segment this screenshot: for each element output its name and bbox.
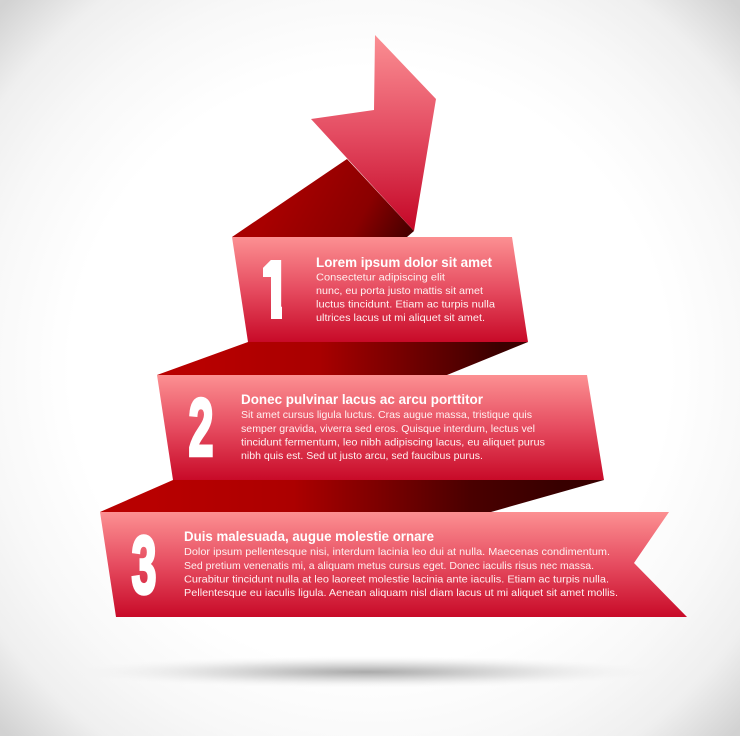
panel 1 ribbon (232, 237, 528, 342)
panel 3 body text: Pellentesque eu iaculis ligula. Aenean aliquam nisl diam lacus ut mi aliquet sit amet mollis. (184, 587, 618, 599)
icon: arrow head (311, 35, 436, 231)
ground shadow (66, 656, 666, 688)
dark fold between panels 2 and 3 (100, 480, 604, 512)
panel 2 (157, 375, 604, 480)
panel 2 body text: nibh quis est. Sed ut justo arcu, sed faucibus purus. (241, 450, 483, 462)
panel 3 (100, 512, 687, 617)
panel 3 body text (184, 546, 618, 599)
panel 1 body text: Consectetur adipiscing elit (316, 272, 445, 284)
number 1: 1 (256, 242, 288, 342)
panel 3 body text: Sed pretium venenatis mi, a aliquam metus cursus eget. Donec iaculis risus nec massa. (184, 560, 594, 572)
panel 1 (232, 237, 528, 342)
dark fold under arrow (232, 159, 414, 237)
panel 2 body text: semper gravida, viverra sed eros. Quisque interdum, lectus vel (241, 423, 535, 435)
panel 3 body text: Dolor ipsum pellentesque nisi, interdum lacinia leo dui at nulla. Maecenas condimentum. (184, 546, 610, 558)
panel 1 body text: nunc, eu porta justo mattis sit amet (316, 285, 483, 297)
panel 2 body text: tincidunt fermentum, leo nibh adipiscing lacus, eu aliquet purus (241, 436, 545, 448)
panel 3 body text: Curabitur tincidunt nulla at leo laoreet molestie lacinia ante iaculis. Etiam ac turpis nulla. (184, 574, 609, 586)
panel 1 heading: Lorem ipsum dolor sit amet (316, 255, 492, 270)
number 3: 3 (132, 520, 156, 611)
panel 2 body text: Sit amet cursus ligula luctus. Cras augue massa, tristique quis (241, 409, 532, 421)
panel 2 body text (241, 409, 545, 462)
panel 3 ribbon with notched end (100, 512, 687, 617)
panel 2 heading: Donec pulvinar lacus ac arcu porttitor (241, 392, 484, 407)
panel 1 body text: ultrices lacus ut mi aliquet sit amet. (316, 312, 485, 324)
dark fold between panels 1 and 2 (157, 342, 528, 375)
number 2: 2 (188, 382, 214, 474)
panel 3 heading: Duis malesuada, augue molestie ornare (184, 529, 434, 544)
panel 1 body text: luctus tincidunt. Etiam ac turpis nulla (316, 298, 495, 310)
panel 1 body text (316, 272, 495, 324)
panel 2 ribbon (157, 375, 604, 480)
folded arrow ribbon tip (232, 35, 436, 237)
